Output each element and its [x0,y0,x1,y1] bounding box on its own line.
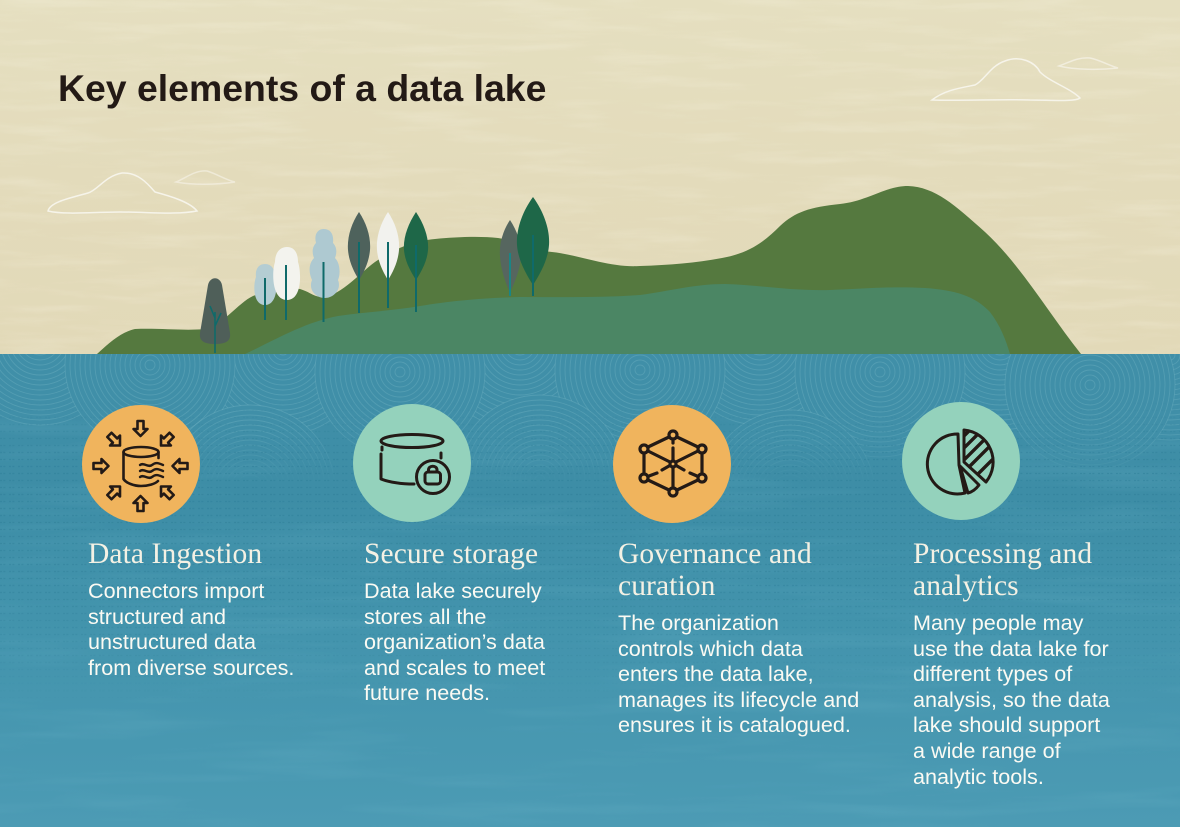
heading: processing and analytics: analytics [913,570,1019,602]
tree: pale blue tall [310,229,340,322]
description: governance and curation [618,610,859,737]
tree: pale blue small [254,264,276,320]
tree: white [273,247,300,320]
heading: governance and curation [618,538,812,602]
heading: governance and curation: Governance and [618,538,812,570]
description: governance and curation: manages its lifecycle and [618,687,859,712]
cloud: left [48,171,235,213]
description: processing and analytics: analytic tools. [913,764,1044,789]
icon: data ingestion [82,405,200,523]
description: secure storage: and scales to meet [364,655,545,680]
icon: processing and analytics [902,402,1020,520]
description: data ingestion: from diverse sources. [88,655,294,680]
heading: data ingestion: Data Ingestion [88,538,262,570]
tree: grey and green pair [500,197,549,296]
description: governance and curation: controls which data [618,636,803,661]
description: secure storage: Data lake securely [364,578,542,603]
heading: processing and analytics: Processing and [913,538,1092,570]
description: processing and analytics: a wide range of [913,738,1061,763]
description: governance and curation: The organization [618,610,779,635]
text block: governance and curation [618,538,859,737]
tree: dark conifer [200,278,230,353]
cloud: top right [932,58,1118,100]
icon: secure storage [353,404,471,522]
back hill [97,186,1081,354]
tree: dark leaf [348,212,370,313]
tree: white leaf [377,212,399,308]
description: processing and analytics: different types of [913,661,1072,686]
description: processing and analytics: lake should support [913,712,1100,737]
title: Key elements of a data lake [58,67,546,109]
description: secure storage: organization’s data [364,629,545,654]
description: data ingestion [88,578,294,680]
icon: governance and curation [613,405,731,523]
heading: governance and curation: curation [618,570,715,602]
text block: secure storage [364,538,546,705]
text block: processing and analytics [913,538,1110,789]
description: secure storage: stores all the [364,604,486,629]
description: data ingestion: structured and [88,604,226,629]
heading: secure storage: Secure storage [364,538,538,570]
description: governance and curation: enters the data lake, [618,661,814,686]
description: processing and analytics [913,610,1110,789]
tree: green leaf [404,212,428,312]
description: data ingestion: unstructured data [88,629,256,654]
heading: processing and analytics [913,538,1092,602]
text block: data ingestion [88,538,294,680]
description: secure storage: future needs. [364,680,490,705]
description: processing and analytics: analysis, so the data [913,687,1110,712]
front hill [245,284,1010,354]
description: secure storage [364,578,546,705]
illustration: hills and trees [47,57,1118,512]
description: governance and curation: ensures it is catalogued. [618,712,851,737]
description: processing and analytics: use the data lake for [913,636,1109,661]
description: processing and analytics: Many people may [913,610,1083,635]
description: data ingestion: Connectors import [88,578,264,603]
